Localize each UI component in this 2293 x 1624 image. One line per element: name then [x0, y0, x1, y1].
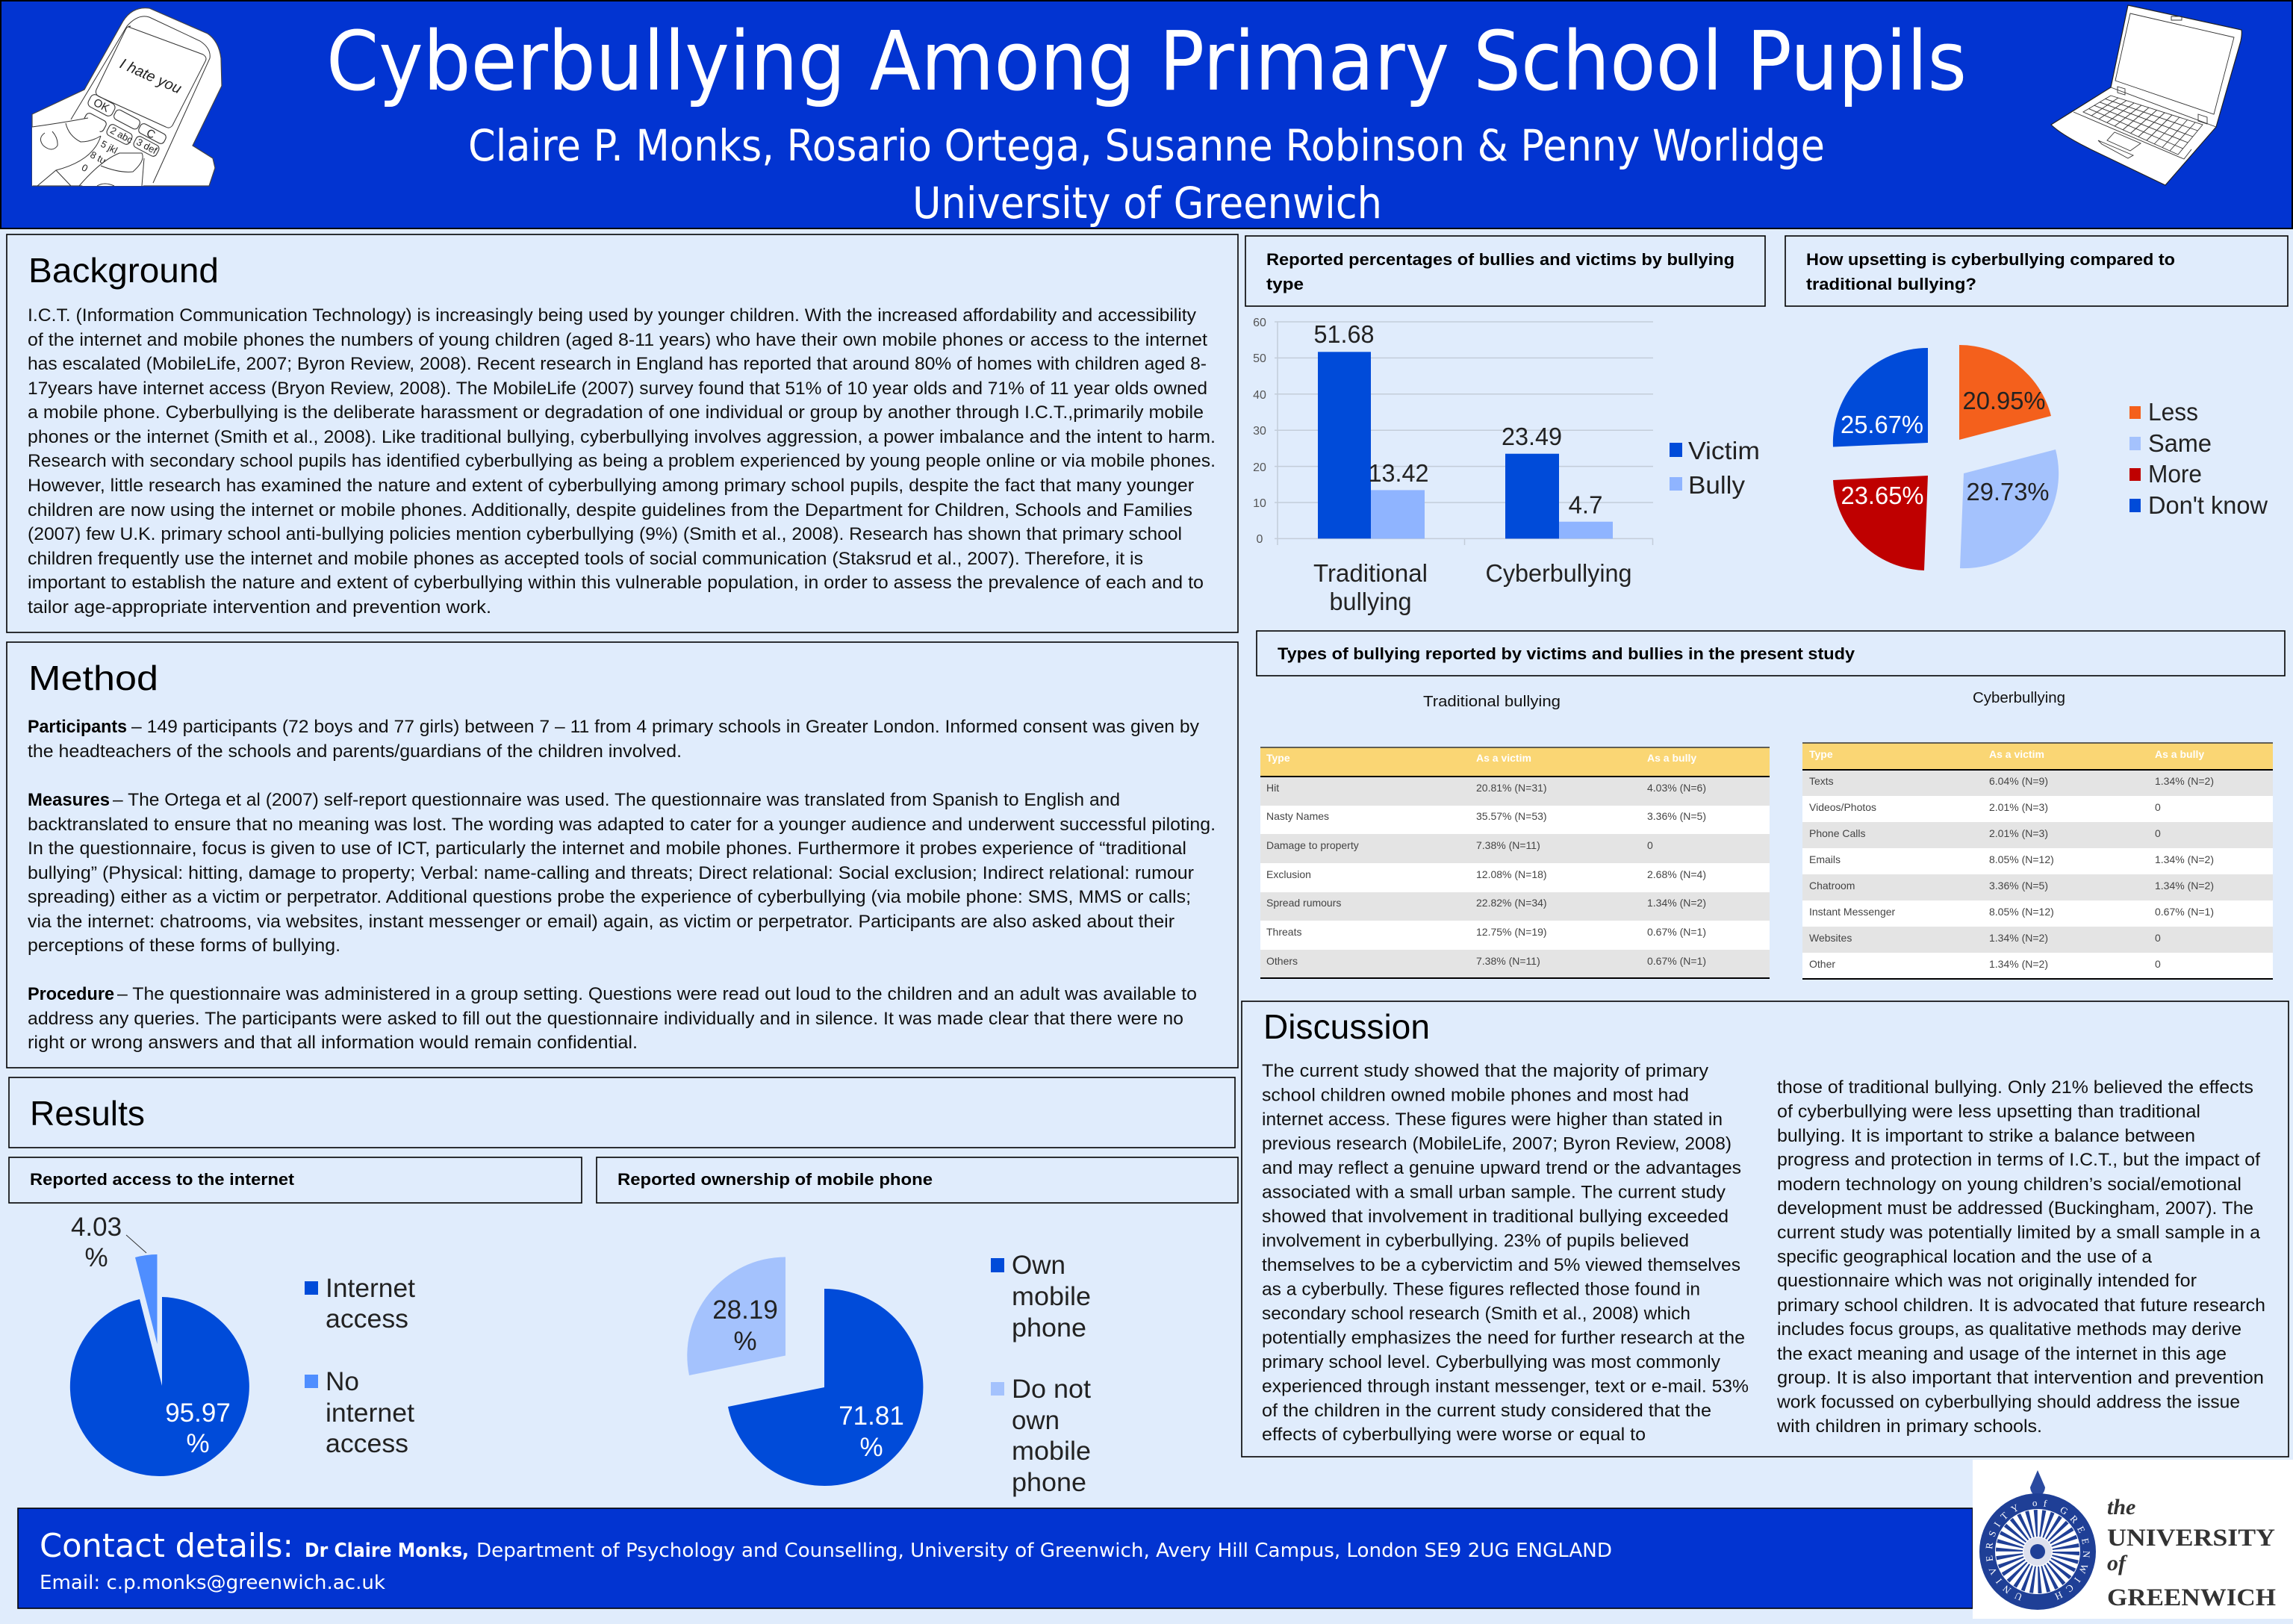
pie chart: how upsetting [1833, 345, 2059, 570]
method: measures [28, 790, 1216, 956]
legend: mobile ownership: own [1012, 1406, 1060, 1435]
header banner [1, 1, 2292, 228]
label: traditional bullying: Traditional bullying [1423, 694, 1561, 710]
discussion column one: involvement in cyberbullying. 23% of pupils believed [1262, 1231, 1689, 1251]
pie chart: mobile ownership: 28.19 [712, 1295, 778, 1325]
panel: mobile ownership heading: Reported ownership of mobile phone [617, 1170, 933, 1189]
icon: hand holding mobile phone [32, 8, 222, 186]
background body text [28, 305, 1216, 617]
legend: internet access: No [326, 1367, 359, 1396]
bar chart: bullies and victims by type: 60 [1253, 317, 1266, 329]
background body text: phones or the internet (Smith et al., 2008). Like traditional bullying, cyberbullying involves aggression, a power imbalance and the intent to harm. [28, 427, 1216, 447]
logo: University of Greenwich [1973, 1460, 2293, 1619]
pie chart: mobile ownership: % [733, 1327, 757, 1356]
method: procedure: – The questionnaire was administered in a group setting. Questions were read out loud to the children and an adult was available to [117, 984, 1197, 1004]
table: traditional bullying: 12.75% (N=19) [1476, 926, 1547, 938]
background body text: important to establish the nature and extent of cyberbullying within this vulnerable population, in order to assess the prevalence of each and to [28, 573, 1204, 593]
table: cyberbullying: 8.05% (N=12) [1989, 906, 2054, 918]
table: traditional bullying: As a bully [1647, 752, 1696, 764]
background body text: I.C.T. (Information Communication Technology) is increasingly being used by younger children. With the increased affordability and accessibility [28, 305, 1196, 326]
legend: how upsetting: More [2148, 460, 2202, 488]
background body text: a mobile phone. Cyberbullying is the deliberate harassment or degradation of one individual or group by another through I.C.T.,primarily mobile [28, 402, 1204, 423]
method: measures: via the internet: chatrooms, via websites, instant messenger or email) again, as victim or perpetrator. Participants are also asked about their [28, 912, 1174, 932]
legend: mobile ownership: phone [1012, 1313, 1086, 1343]
table: traditional bullying: Exclusion [1266, 868, 1311, 880]
discussion column one: potentially emphasizes the need for further research at the [1262, 1328, 1745, 1348]
pie chart: mobile ownership: 71.81 [839, 1401, 904, 1431]
panel: upsetting heading: traditional bullying? [1806, 275, 1976, 293]
discussion column two: includes focus groups, as qualitative methods may derive [1777, 1319, 2241, 1340]
legend: how upsetting: Less [2148, 398, 2198, 426]
discussion column one: associated with a small urban sample. The current study [1262, 1183, 1726, 1202]
method: participants: Participants [28, 717, 127, 737]
panel: background [7, 234, 1238, 632]
table: traditional bullying: 35.57% (N=53) [1476, 810, 1547, 822]
table: cyberbullying [1802, 743, 2273, 979]
table: cyberbullying: Type [1809, 748, 1833, 760]
panel: bar chart heading [1245, 236, 1765, 306]
table: cyberbullying: 1.34% (N=2) [2155, 880, 2214, 892]
panel: upsetting heading [1785, 236, 2288, 306]
icon: hand holding mobile phone: 2 abc [108, 125, 135, 146]
table: traditional bullying: Others [1266, 955, 1298, 967]
bar chart: bullies and victims by type: 13.42 [1368, 459, 1429, 487]
discussion column one: primary school level. Cyberbullying was most commonly [1262, 1352, 1720, 1372]
bar chart: bullies and victims by type: 20 [1253, 461, 1266, 474]
table: traditional bullying: Hit [1266, 782, 1279, 794]
table: traditional bullying: 7.38% (N=11) [1476, 955, 1540, 967]
table: traditional bullying: 20.81% (N=31) [1476, 782, 1547, 794]
table: traditional bullying: 2.68% (N=4) [1647, 868, 1706, 880]
method: measures: Measures [28, 790, 110, 810]
table: traditional bullying: Damage to property [1266, 839, 1359, 851]
table: cyberbullying: 3.36% (N=5) [1989, 880, 2048, 892]
discussion column one: school children owned mobile phones and most had [1262, 1086, 1689, 1105]
table: cyberbullying: Videos/Photos [1809, 801, 1876, 813]
bar chart: bullies and victims by type: 0 [1257, 533, 1263, 546]
heading: discussion: Discussion [1263, 1007, 1430, 1046]
table: traditional bullying: 12.08% (N=18) [1476, 868, 1547, 880]
table: cyberbullying: Emails [1809, 853, 1841, 865]
discussion column one: previous research (MobileLife, 2007; Byron Review, 2008) [1262, 1133, 1732, 1154]
table: traditional bullying [1260, 747, 1770, 978]
icon: hand holding mobile phone: C [144, 127, 158, 142]
table: cyberbullying: 2.01% (N=3) [1989, 801, 2048, 813]
panel: upsetting heading: How upsetting is cyberbullying compared to [1806, 250, 2175, 269]
logo wordmark: UNIVERSITY [2107, 1525, 2275, 1552]
table: traditional bullying: 0.67% (N=1) [1647, 955, 1706, 967]
discussion column one: themselves to be a cybervictim and 5% viewed themselves [1262, 1255, 1740, 1275]
method: measures: spreading) either as a victim or perpetrator. Additional questions probe the experience of cyberbullying (via mobile phone: SMS, MMS or calls; [28, 887, 1191, 907]
pie chart: how upsetting: 23.65% [1841, 482, 1923, 509]
legend: internet access: access [326, 1429, 408, 1458]
method: procedure: address any queries. The participants were asked to fill out the questionnaire individually and in silence. It was made clear that there were no [28, 1009, 1183, 1029]
legend: internet access: internet [326, 1399, 414, 1428]
table: traditional bullying: 4.03% (N=6) [1647, 782, 1706, 794]
title: Cyberbullying Among Primary School Pupils [326, 13, 1967, 109]
panel: contact details: Contact details: [40, 1527, 293, 1565]
discussion column two: primary school children. It is advocated that future research [1777, 1295, 2265, 1316]
bar chart: bullies and victims by type: 4.7 [1569, 491, 1602, 518]
bar chart: bullies and victims by type: 30 [1253, 425, 1266, 438]
pie chart: internet access: % [186, 1429, 210, 1458]
table: cyberbullying: Instant Messenger [1809, 906, 1896, 918]
discussion column two [1776, 1077, 2265, 1437]
bar chart: bullies and victims by type: 40 [1253, 389, 1266, 402]
panel: contact details: Email: c.p.monks@greenwich.ac.uk [40, 1572, 385, 1594]
method: participants: – 149 participants (72 boys and 77 girls) between 7 – 11 from 4 primary schools in Greater London. Informed consent was given by [131, 717, 1199, 737]
background body text: has escalated (MobileLife, 2007; Byron Review, 2008). Recent research in England has reported that around 80% of homes with children aged 8- [28, 354, 1207, 374]
method: procedure: Procedure [28, 984, 114, 1004]
icon: hand holding mobile phone: 5 jkl [99, 138, 119, 156]
table: traditional bullying: As a victim [1476, 752, 1531, 764]
legend: internet access [305, 1274, 415, 1458]
background body text: of the internet and mobile phones the numbers of young children (aged 8-11 years) who have their own mobile phones or access to the internet [28, 330, 1207, 350]
icon: hand holding mobile phone: 3 def [134, 136, 159, 156]
bar chart: bullies and victims by type: bullying [1329, 588, 1411, 615]
logo wordmark [2107, 1495, 2276, 1611]
logo wordmark: of [2107, 1551, 2128, 1575]
table: cyberbullying: 1.34% (N=2) [2155, 775, 2214, 787]
panel: reported access heading [9, 1157, 582, 1203]
method: measures: perceptions of these forms of bullying. [28, 936, 340, 956]
icon: hand holding mobile phone: I hate you [117, 55, 184, 97]
pie chart: internet access: 4.03 [71, 1213, 122, 1242]
icon: hand holding mobile phone: 0 [80, 161, 90, 174]
icon: hand holding mobile phone: 8 tuv [88, 149, 113, 169]
background body text: (2007) few U.K. primary school anti-bullying policies mention cyberbullying (9%) (Smith et al., 2008). Research has shown that primary school [28, 524, 1182, 544]
discussion column one: internet access. These figures were higher than stated in [1262, 1110, 1723, 1130]
discussion column one: secondary school research (Smith et al., 2008) which [1262, 1304, 1690, 1324]
table: traditional bullying: Type [1266, 752, 1290, 764]
table: cyberbullying: 2.01% (N=3) [1989, 827, 2048, 839]
panel: contact details: Dr Claire Monks, [305, 1540, 469, 1562]
table: traditional bullying: 0.67% (N=1) [1647, 926, 1706, 938]
discussion column two: those of traditional bullying. Only 21% believed the effects [1777, 1077, 2253, 1098]
legend: bar chart [1670, 437, 1760, 499]
discussion column two: with children in primary schools. [1776, 1416, 2042, 1437]
label: cyberbullying: Cyberbullying [1973, 690, 2065, 706]
table: traditional bullying: Nasty Names [1266, 810, 1329, 822]
legend: internet access: access [326, 1304, 408, 1334]
legend: internet access: Internet [326, 1274, 415, 1303]
discussion column one: of the children in the current study considered that the [1262, 1401, 1711, 1421]
discussion column two: bullying. It is important to strike a balance between [1777, 1126, 2195, 1146]
logo wordmark: GREENWICH [2107, 1584, 2276, 1611]
table: traditional bullying: 3.36% (N=5) [1647, 810, 1706, 822]
bar chart: bullies and victims by type: 23.49 [1502, 423, 1562, 450]
table: cyberbullying: 0 [2155, 932, 2161, 944]
table: traditional bullying: Spread rumours [1266, 897, 1341, 909]
table: traditional bullying: Threats [1266, 926, 1301, 938]
legend: how upsetting [2129, 398, 2268, 519]
method: participants: the headteachers of the schools and parents/guardians of the children involved. [28, 741, 682, 762]
panel: bar chart heading: Reported percentages of bullies and victims by bullying [1266, 250, 1734, 269]
legend: mobile ownership: Do not [1012, 1375, 1091, 1404]
discussion column one [1262, 1061, 1749, 1445]
table: cyberbullying: 6.04% (N=9) [1989, 775, 2048, 787]
pie chart: how upsetting: 29.73% [1967, 478, 2049, 505]
icon: laptop [2051, 5, 2241, 185]
panel: discussion [1242, 1001, 2289, 1457]
background body text: tailor age-appropriate intervention and prevention work. [28, 597, 491, 617]
discussion column two: specific geographical location and the use of a [1777, 1247, 2153, 1267]
table: cyberbullying: 1.34% (N=2) [1989, 958, 2048, 970]
pie chart: internet access: 95.97 [165, 1399, 231, 1428]
method: measures: – The Ortega et al (2007) self-report questionnaire was used. The questionnaire was translated from Spanish to English and [113, 790, 1120, 810]
legend: how upsetting: Don't know [2148, 491, 2268, 519]
table: traditional bullying: 22.82% (N=34) [1476, 897, 1547, 909]
discussion column two: work focussed on cyberbullying should address the issue [1776, 1392, 2240, 1413]
background body text: However, little research has examined the nature and extent of cyberbullying among primary school pupils, despite the fact that many younger [28, 476, 1194, 496]
panel: types of bullying heading [1257, 631, 2285, 676]
heading: method: Method [28, 659, 158, 697]
table: cyberbullying: Other [1809, 958, 1835, 970]
method: measures: bullying” (Physical: hitting, damage to property; Verbal: name-calling and threats; Direct relational: Social exclusion; Indirect relational: rumour [28, 863, 1194, 883]
legend: mobile ownership: mobile [1012, 1282, 1091, 1311]
panel: mobile ownership heading [597, 1157, 1238, 1203]
table: cyberbullying: 0 [2155, 801, 2161, 813]
pie chart: internet access [70, 1213, 249, 1476]
method: procedure: right or wrong answers and that all information would remain confidential. [28, 1033, 638, 1053]
discussion column two: current study was potentially limited by a small sample in a [1777, 1223, 2261, 1242]
legend: bar chart: Victim [1688, 437, 1760, 464]
legend: mobile ownership: mobile [1012, 1437, 1091, 1466]
background body text: Research with secondary school pupils has identified cyberbullying as being a problem experienced by young people online or via mobile phones. [28, 451, 1216, 471]
icon: university seal: UNIVERSITY of GREENWICH [1986, 1499, 2090, 1601]
pie chart: mobile ownership: % [859, 1433, 883, 1462]
heading: background: Background [28, 251, 219, 290]
discussion column two: questionnaire which was not originally intended for [1777, 1271, 2197, 1291]
table: cyberbullying: Phone Calls [1809, 827, 1865, 839]
pie chart: internet access: % [84, 1243, 108, 1272]
method: measures: backtranslated to ensure that no meaning was lost. The wording was adapted to cater for a younger audience and underwent successful piloting. [28, 815, 1216, 835]
table: cyberbullying: 0 [2155, 827, 2161, 839]
discussion column two: development must be addressed (Buckingham, 2007). The [1777, 1198, 2253, 1219]
bar chart: bullies and victims by type: Traditional [1313, 559, 1428, 587]
panel: results heading: Results [30, 1094, 145, 1133]
method: measures: In the questionnaire, focus is given to use of ICT, particularly the internet and mobile phones. Furthermore it probes experience of “traditional [28, 839, 1186, 859]
bar chart: bullies and victims by type: 10 [1253, 497, 1266, 510]
authors: Claire P. Monks, Rosario Ortega, Susanne Robinson & Penny Worlidge [468, 120, 1825, 171]
table: traditional bullying: 0 [1647, 839, 1653, 851]
table: cyberbullying: Chatroom [1809, 880, 1855, 892]
table: cyberbullying: 1.34% (N=2) [1989, 932, 2048, 944]
discussion column two: modern technology on young children’s social/emotional [1777, 1175, 2241, 1195]
table: cyberbullying: As a bully [2155, 748, 2204, 760]
discussion column two: group. It is also important that intervention and prevention [1777, 1368, 2264, 1388]
bar chart: bullies and victims by type [1253, 317, 1653, 615]
logo wordmark: the [2107, 1495, 2135, 1519]
discussion column one: showed that involvement in traditional bullying exceeded [1262, 1207, 1729, 1227]
icon: hand holding mobile phone: OK [91, 96, 111, 115]
legend: mobile ownership [991, 1251, 1091, 1497]
table: cyberbullying: 0 [2155, 958, 2161, 970]
discussion column one: experienced through instant messenger, text or e-mail. 53% [1262, 1377, 1749, 1396]
panel: bar chart heading: type [1266, 275, 1304, 293]
method: procedure [28, 984, 1197, 1053]
discussion column one: The current study showed that the majority of primary [1262, 1061, 1708, 1081]
panel: method [7, 642, 1238, 1068]
discussion column one: effects of cyberbullying were worse or equal to [1262, 1425, 1646, 1445]
legend: mobile ownership: Own [1012, 1251, 1065, 1280]
panel: reported access heading: Reported access to the internet [30, 1170, 295, 1189]
pie chart: mobile ownership [687, 1257, 923, 1486]
panel: types of bullying heading: Types of bullying reported by victims and bullies in the present study [1278, 644, 1855, 663]
legend: mobile ownership: phone [1012, 1468, 1086, 1497]
background body text: children are now using the internet or mobile phones. Additionally, despite guidelines from the Department for Children, Schools and Families [28, 500, 1192, 520]
pie chart: how upsetting: 25.67% [1841, 411, 1923, 438]
panel: results heading [9, 1077, 1235, 1148]
bar chart: bullies and victims by type: 51.68 [1314, 320, 1374, 348]
panel: contact details: Department of Psychology and Counselling, University of Greenwich, Avery Hill Campus, London SE9 2UG ENGLAND [476, 1540, 1612, 1562]
discussion column two: progress and protection in terms of I.C.T., but the impact of [1777, 1150, 2260, 1170]
table: cyberbullying: 8.05% (N=12) [1989, 853, 2054, 865]
panel: contact details [18, 1508, 1973, 1608]
discussion column two: the exact meaning and usage of the internet in this age [1777, 1344, 2227, 1364]
table: traditional bullying: 7.38% (N=11) [1476, 839, 1540, 851]
discussion column two: of cyberbullying were less upsetting than traditional [1777, 1102, 2200, 1121]
pie chart: how upsetting: 20.95% [1962, 387, 2046, 414]
background body text: children frequently use the internet and mobile phones as accepted tools of social communication (Staksrud et al., 2007). Therefore, it is [28, 549, 1143, 569]
table: cyberbullying: 1.34% (N=2) [2155, 853, 2214, 865]
table: traditional bullying: 1.34% (N=2) [1647, 897, 1706, 909]
method: participants [28, 717, 1199, 762]
legend: bar chart: Bully [1688, 471, 1746, 499]
bar chart: bullies and victims by type: Cyberbullying [1486, 559, 1632, 587]
background body text: 17years have internet access (Bryon Review, 2008). The MobileLife (2007) survey found that 51% of 10 year olds and 71% of 11 year olds owned [28, 379, 1207, 399]
table: cyberbullying: Texts [1809, 775, 1834, 787]
university: University of Greenwich [912, 178, 1382, 228]
table: cyberbullying: As a victim [1989, 748, 2044, 760]
discussion column one: as a cyberbully. These figures reflected those found in [1262, 1280, 1700, 1299]
discussion column one: and may reflect a genuine upward trend or the advantages [1262, 1158, 1741, 1178]
table: cyberbullying: 0.67% (N=1) [2155, 906, 2214, 918]
table: cyberbullying: Websites [1809, 932, 1852, 944]
bar chart: bullies and victims by type: 50 [1253, 352, 1266, 365]
legend: how upsetting: Same [2148, 429, 2212, 457]
